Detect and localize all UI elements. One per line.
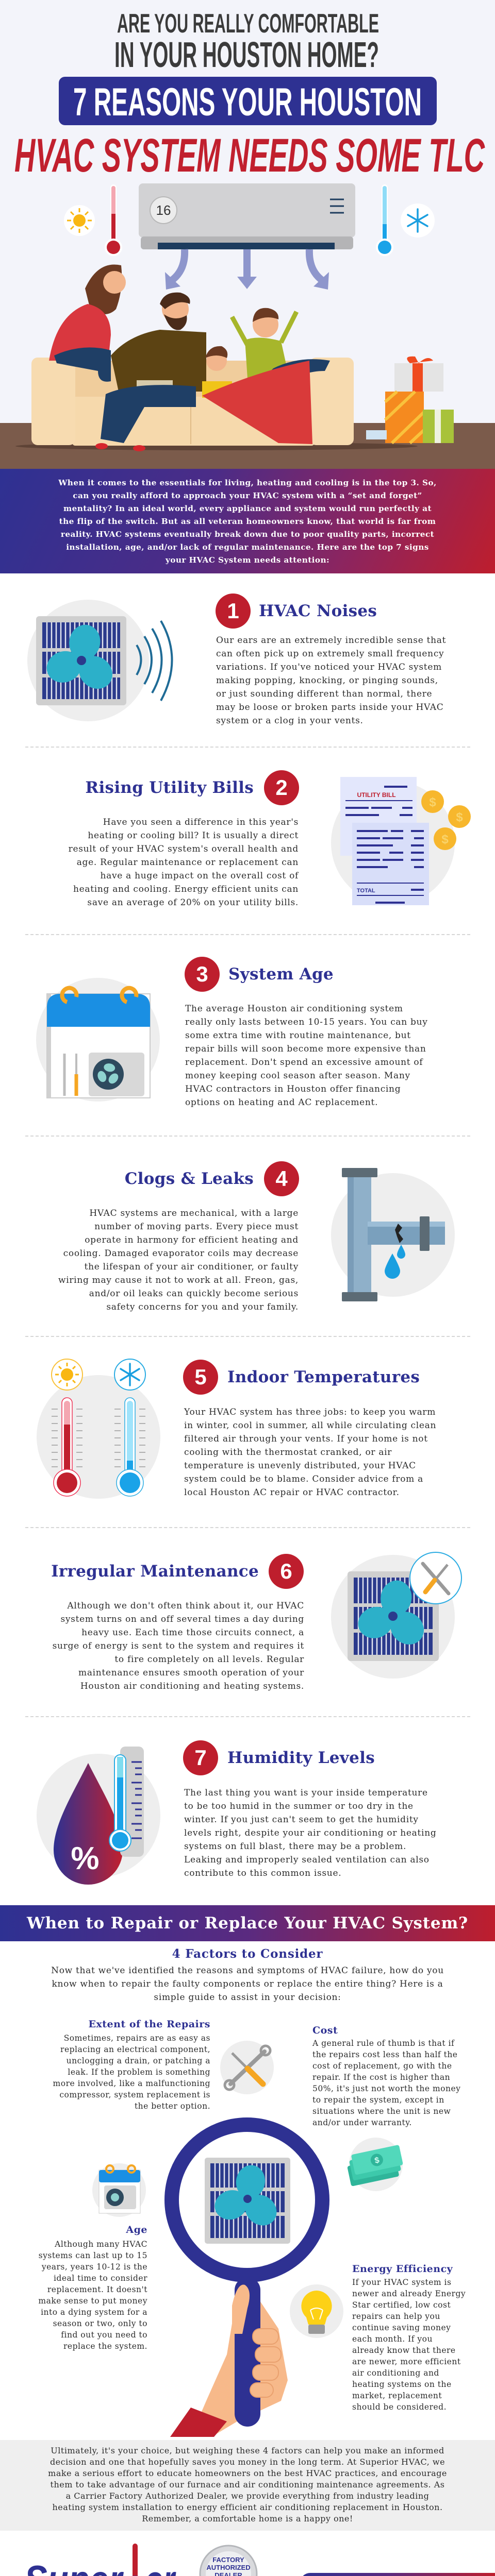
icon: utility bill and coins: $ [456, 810, 463, 824]
text: system age [185, 1004, 428, 1108]
text: cost: the repairs cost less than half the [312, 2050, 457, 2059]
text: humidity: systems on full blast, there may be a problem. [184, 1841, 406, 1852]
badge 7: 7 [194, 1745, 207, 1770]
text: clogs: HVAC systems are mechanical, with a large [89, 1208, 299, 1218]
text: extent: unclogging a drain, or patching a [67, 2056, 210, 2065]
text: clogs: number of moving parts. Every piece must [94, 1222, 299, 1232]
badge 6: 6 [280, 1559, 292, 1583]
badge 7 [183, 1740, 218, 1775]
text: humidity: contribute to this common issue. [184, 1868, 341, 1878]
text: energy: newer and already Energy [352, 2289, 466, 2298]
intro band [0, 469, 495, 573]
text: cost [312, 2039, 460, 2127]
section 5: Indoor Temperatures [37, 1359, 436, 1499]
heading: Clogs & Leaks: Clogs & Leaks [125, 1170, 254, 1188]
text: age: replacement. It doesn't [47, 2285, 147, 2294]
text: closing: decision and one that hopefully saves you money in the long term. At Superior HVAC, we [50, 2457, 445, 2467]
AC unit [139, 183, 355, 249]
text: system age: replacement. Don't spend an excessive amount of [185, 1057, 423, 1067]
factor: Cost [312, 2025, 460, 2127]
text: energy: should be considered. [352, 2402, 447, 2412]
badge 5: 5 [194, 1365, 207, 1389]
text: system age: really only lasts between 10-15 years. You can buy [185, 1017, 428, 1027]
icon: hot thermometer and sun [64, 184, 122, 256]
badge 1: 1 [227, 599, 239, 623]
subheading: 4 Factors to Consider: 4 Factors to Consider [172, 1947, 323, 1961]
badge 2: 2 [275, 775, 288, 800]
text: maintenance [53, 1601, 304, 1691]
text: temperatures: Your HVAC system has three jobs: to keep you warm [184, 1407, 436, 1417]
text: temperatures: local Houston AC repair or HVAC contractor. [184, 1487, 400, 1498]
text: noises: or just sounding different than normal, there [216, 689, 432, 699]
text: maintenance: Although we don't often think about it, our HVAC [67, 1601, 304, 1611]
text: temperatures [184, 1407, 436, 1498]
icon: light bulb [290, 2284, 343, 2338]
factor: Energy Efficiency [352, 2263, 466, 2412]
text: factors intro: know when to repair the faulty components or replace the entire thing? Here is a [52, 1979, 443, 1989]
text: closing: heating system installation to energy efficient air conditioning replacement in Houston. [52, 2502, 443, 2512]
sofa [31, 358, 354, 446]
header illustration [0, 0, 495, 469]
text: cost: to repair the system, except in [312, 2095, 444, 2105]
text: extent: Sometimes, repairs are as easy as [64, 2033, 210, 2043]
icon: grille with tools [331, 1552, 462, 1679]
text: clogs: wiring may cause it not to work at all. Freon, gas, [58, 1275, 299, 1285]
badge: Carrier factory authorized dealer: AUTHORIZED [206, 2564, 251, 2571]
text: bills: heating and cooling. Energy efficient units can [73, 884, 299, 894]
text: closing: Ultimately, it's your choice, but weighing these 4 factors can help you make an informed [51, 2446, 444, 2455]
badge 1 [216, 594, 251, 629]
text: maintenance: to fire completely on all levels. Regular [114, 1654, 304, 1665]
text: bills: Have you seen a difference in this year's [103, 817, 299, 827]
icon: utility bill and coins [331, 777, 471, 905]
section 2: Rising Utility Bills [69, 770, 471, 908]
text: system age: money keeping cool season after season. Many [185, 1071, 410, 1081]
text: age: into a dying system for a [41, 2308, 147, 2317]
badge: Carrier factory authorized dealer [199, 2545, 258, 2576]
text: energy: already know that there [352, 2346, 456, 2355]
text: age: find out you need to [61, 2330, 147, 2340]
text: clogs: operate in harmony for efficient heating and [85, 1235, 299, 1245]
family people [49, 264, 330, 451]
icon: utility bill and coins: $ [429, 795, 436, 809]
heading: age: Age [126, 2224, 147, 2235]
text: clogs [58, 1208, 299, 1312]
text: system age: repair bills will soon become more expensive than [185, 1044, 426, 1054]
intro text: When it comes to the essentials for living, heating and cooling is in the top 3. So, [58, 478, 437, 487]
intro text [58, 478, 437, 565]
badge 3 [185, 957, 220, 992]
intro text: your HVAC System needs attention: [166, 555, 329, 565]
text: cost: A general rule of thumb is that if [312, 2039, 454, 2048]
magnifying glass with hand [164, 2117, 329, 2437]
text: noises: system or a clog in your vents. [216, 716, 364, 726]
heading: Humidity Levels: Humidity Levels [227, 1749, 375, 1767]
gifts [366, 357, 454, 443]
section 7: Humidity Levels [37, 1740, 436, 1885]
text: closing: a Carrier Factory Authorized Dealer, we provide everything from industry leading [66, 2491, 429, 2501]
text: age: Although many HVAC [55, 2240, 147, 2249]
icon: utility bill and coins: TOTAL [357, 888, 375, 894]
intro text: can you really afford to approach your HVAC system with a “set and forget” [73, 491, 422, 500]
text: factors intro: simple guide to assist in your decision: [154, 1992, 341, 2003]
intro text: mentality? In an ideal world, every appliance and system would run perfectly at [63, 504, 432, 513]
text: age: years, years 10-12 is the [42, 2262, 147, 2272]
text: noises [216, 635, 446, 726]
text: age: season or two, only to [53, 2319, 147, 2328]
text: energy: air conditioning and [352, 2368, 439, 2378]
badge 4: 4 [275, 1166, 288, 1191]
icon: humidity drop with thermometer [37, 1747, 160, 1885]
icon: fan grille with sound waves [27, 600, 173, 721]
text: noises: variations. If you've noticed your HVAC system [216, 662, 442, 672]
URL pill [300, 2573, 495, 2576]
section 1: HVAC Noises [27, 594, 446, 726]
text: energy: are newer, more efficient [352, 2357, 461, 2366]
text: energy: repairs can help you [352, 2312, 440, 2321]
section 4: Clogs & Leaks [58, 1161, 455, 1312]
banner: When to Repair or Replace [0, 1905, 495, 1941]
badge 6 [269, 1554, 304, 1589]
text: factors intro: Now that we've identified the reasons and symptoms of HVAC failure, how do you [51, 1965, 444, 1976]
text: clogs: the lifespan of your air conditioner, or faulty [85, 1262, 299, 1272]
icon: money: $ [374, 2156, 380, 2165]
text: extent [53, 2033, 210, 2111]
heading: Rising Utility Bills: Rising Utility Bills [85, 778, 254, 797]
badge 4 [264, 1161, 299, 1196]
text: age: replace the system. [63, 2342, 147, 2351]
icon: calendar small [92, 2163, 146, 2217]
text: temperatures: temperature is unevenly distributed, your HVAC [184, 1461, 416, 1471]
heading: cost: Cost [312, 2025, 338, 2036]
heading: Irregular Maintenance: Irregular Maintenance [51, 1562, 259, 1581]
heading: System Age: System Age [228, 965, 334, 984]
intro text: installation, age, and/or lack of regular maintenance. Here are the top 7 signs [66, 543, 429, 552]
icon: money [348, 2138, 403, 2191]
icon: leaking pipe [331, 1168, 455, 1301]
banner: When to Repair or Replace: When to Repair or Replace Your HVAC System? [27, 1914, 468, 1933]
text: cost: 50%, it's just not worth the money [312, 2084, 460, 2093]
text: humidity: Leaking and improperly sealed ventilation can also [184, 1855, 430, 1865]
intro text: the flip of the switch. But as all veteran homeowners know, that world is far from [59, 517, 436, 526]
text: age: make sense to put money [38, 2296, 147, 2306]
arrows: airflow [165, 249, 329, 290]
text: noises: Our ears are an extremely incredible sense that [216, 635, 446, 646]
text: noises: can often pick up on extremely small frequency [216, 649, 444, 659]
text: maintenance: heavy use. Each time those circuits connect, a [81, 1628, 304, 1638]
text: extent: compressor, system replacement is [59, 2090, 210, 2099]
text: maintenance: surge of energy is sent to the system and requires it [53, 1641, 304, 1651]
icon: humidity drop with thermometer: % [71, 1841, 100, 1876]
icon: cold thermometer and snowflake [376, 184, 435, 256]
icon: calendar with AC [36, 978, 160, 1101]
factor: Age [38, 2224, 147, 2351]
intro text: reality. HVAC systems eventually break down due to poor quality parts, incorrect [61, 530, 434, 539]
text: system age: The average Houston air conditioning system [185, 1004, 403, 1014]
text: extent: the better option. [135, 2102, 210, 2111]
text: humidity: winter. If you just can't seem to get the humidity [184, 1815, 419, 1825]
text: bills: age. Regular maintenance or replacement can [77, 857, 299, 868]
text: extent: replacing an electrical component, [60, 2045, 210, 2054]
heading: extent: Extent of the Repairs [88, 2019, 210, 2030]
AC unit: 16 [156, 202, 171, 218]
icon: tools [220, 2041, 274, 2094]
text: age: systems can last up to 15 [39, 2251, 147, 2260]
text: system age: options on heating and AC replacement. [185, 1097, 378, 1108]
text: temperatures: cooling with the thermostat cranked, or air [184, 1447, 392, 1458]
text: cost: situations where the unit is new [312, 2107, 451, 2116]
heading: energy: Energy Efficiency [352, 2263, 453, 2275]
logo: Superior HVAC [24, 2544, 176, 2576]
text: bills: result of your HVAC system's overall health and [69, 844, 299, 854]
text: closing [48, 2446, 447, 2523]
icon: utility bill and coins: $ [441, 833, 449, 846]
text: energy: continue saving money [352, 2323, 451, 2332]
text: cost: repair. If the cost is higher than [312, 2073, 450, 2082]
text: energy [352, 2278, 466, 2412]
text: clogs: cooling. Damaged evaporator coils may decrease [63, 1248, 299, 1259]
text: humidity: The last thing you want is your inside temperature [184, 1788, 428, 1798]
text: temperatures: in winter, cool in summer, all while circulating clean [184, 1420, 436, 1431]
text: energy: heating systems on the [352, 2380, 452, 2389]
text: energy: market, replacement [352, 2391, 442, 2400]
text: maintenance: Houston air conditioning and heating systems. [80, 1681, 304, 1691]
text: bills [69, 817, 299, 908]
text: closing: Remember, a comfortable home is a happy one! [142, 2514, 353, 2523]
floor [0, 423, 495, 469]
text: humidity: levels right, despite your air conditioning or heating [184, 1828, 436, 1838]
text: bills: have a huge impact on the overall cost of [101, 871, 299, 881]
badge 2 [264, 770, 299, 805]
text: energy: each month. If you [352, 2334, 433, 2344]
text: system age: some extra time with routine maintenance, but [185, 1030, 411, 1041]
text: age [38, 2240, 147, 2351]
text: closing: make a serious effort to educate homeowners on the best HVAC practices, and encourage [48, 2468, 447, 2478]
text: humidity: to be too humid in the summer or too dry in the [184, 1801, 414, 1811]
text: noises: making popping, knocking, or pinging sounds, [216, 675, 438, 686]
text: extent: more involved, like a malfunctioning [53, 2079, 210, 2088]
text: bills: save an average of 20% on your utility bills. [87, 897, 299, 908]
text: clogs: and/or oil leaks can quickly become serious [89, 1289, 299, 1299]
text: energy: Star certified, low cost [352, 2300, 451, 2310]
text: closing: them to take advantage of our furnace and air conditioning maintenance agreements. As [51, 2480, 444, 2489]
icon: thermometers hot and cold [37, 1359, 160, 1499]
text: extent: leak. If the problem is something [68, 2067, 210, 2077]
heading: Indoor Temperatures: Indoor Temperatures [227, 1368, 420, 1386]
text: noises: may be loose or broken parts inside your HVAC [216, 702, 443, 713]
text: energy: If your HVAC system is [352, 2278, 451, 2287]
text: maintenance: maintenance ensures smooth operation of your [78, 1668, 304, 1678]
text: humidity [184, 1788, 436, 1878]
text: temperatures: filtered air through your vents. If your home is not [184, 1434, 428, 1444]
text: factors intro [51, 1965, 444, 2003]
text: bills: heating or cooling bill? It is usually a direct [88, 831, 299, 841]
badge 3: 3 [196, 962, 208, 986]
text: temperatures: system could be to blame. Consider advice from a [184, 1474, 423, 1484]
section 3: System Age [36, 957, 428, 1108]
section 6: Irregular Maintenance [51, 1552, 462, 1691]
text: cost: cost of replacement, go with the [312, 2061, 452, 2071]
closing panel [0, 2440, 495, 2531]
text: system age: HVAC contractors in Houston offer financing [185, 1084, 401, 1094]
text: age: ideal time to consider [54, 2274, 147, 2283]
text: maintenance: system turns on and off several times a day during [60, 1614, 304, 1624]
badge 5 [183, 1360, 218, 1395]
text: cost: and/or under warranty. [312, 2118, 412, 2127]
badge: Carrier factory authorized dealer: FACTORY [212, 2556, 244, 2564]
heading: HVAC Noises: HVAC Noises [259, 602, 377, 620]
factor: Extent of the Repairs [53, 2019, 210, 2111]
icon: utility bill and coins: UTILITY BILL [357, 791, 396, 799]
text: clogs: safety concerns for you and your family. [106, 1302, 299, 1312]
